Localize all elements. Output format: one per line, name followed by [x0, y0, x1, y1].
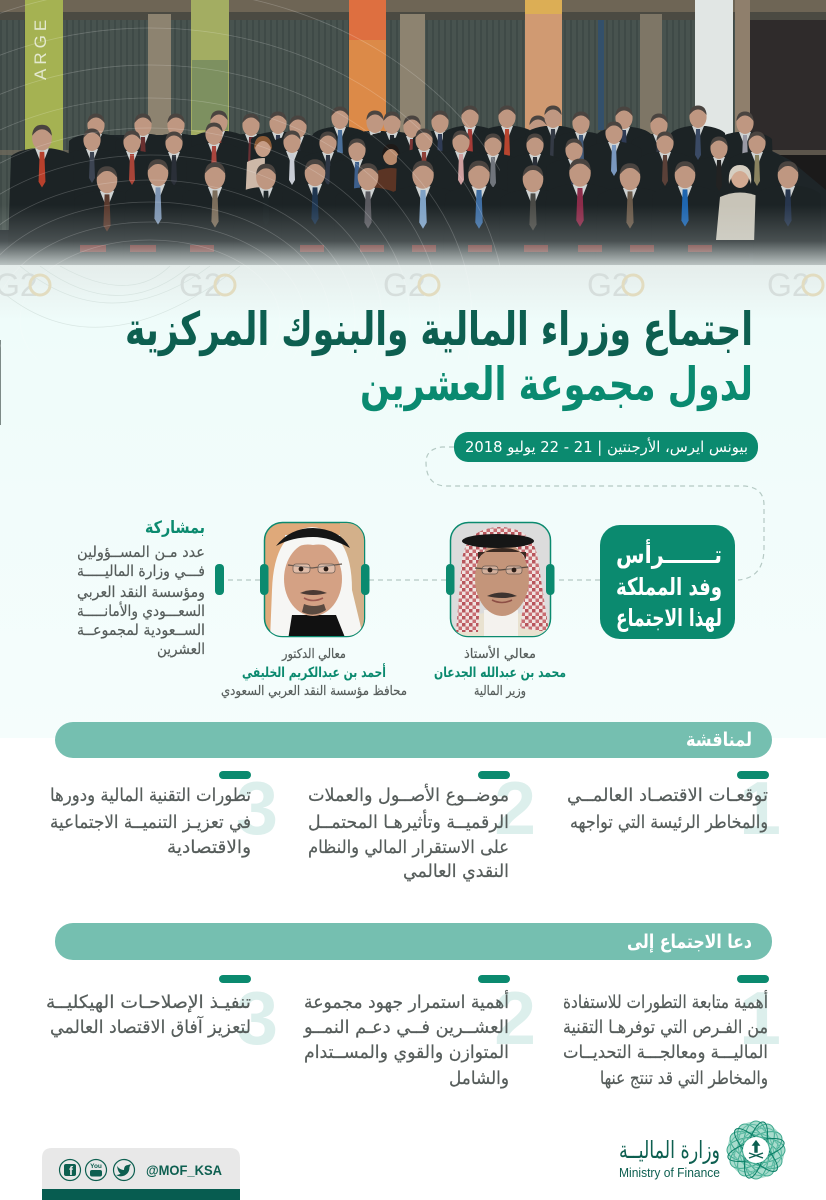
caption: SAMA Governor: محافظ مؤسسة النقد العربي السعودي: [221, 684, 407, 699]
dashed connector: [224, 447, 764, 580]
ministry of finance logo: [619, 1118, 788, 1182]
call 2: G20 efforts: المتوازن والقوي والمســتدام: [304, 1042, 509, 1063]
caption: Minister of Finance: وزير المالية: [474, 684, 526, 699]
date and location pill: بيونس ايرس، الأرجنتين | 21 - 22 يوليو 2018: [465, 437, 748, 456]
call 1: follow developments: 1: [739, 976, 781, 1060]
dark mass of suits: [0, 135, 826, 265]
participation text block: عدد مـن المســؤولين: [77, 543, 205, 561]
item 3: fintech: في تعزيـز التنميــة الاجتماعية: [50, 812, 251, 833]
title: [125, 302, 753, 411]
caption: SAMA Governor: معالي الدكتور: [281, 647, 346, 662]
social handle: @MOF_KSA: [146, 1162, 222, 1178]
item 1: global economy: 1: [739, 766, 781, 850]
item 2: digital assets: الرقميــة وتأثيرهـا المحتمــل: [308, 809, 509, 833]
G20 watermark logos: G2: [179, 267, 222, 303]
contour lines on light band: [0, 266, 240, 327]
social media footer box: [42, 1148, 240, 1200]
G20 watermark logos: G2: [587, 267, 630, 303]
call 2: G20 efforts: 2: [494, 976, 536, 1060]
caption: Minister of Finance: [434, 645, 566, 699]
call 3: structural reforms: لتعزيز آفاق الاقتصاد العالمي: [50, 1015, 251, 1038]
logo rosette: [724, 1118, 788, 1182]
contour line pattern over photo: [0, 0, 500, 348]
call 3: structural reforms: تنفيـذ الإصلاحـات الهيكليــة: [46, 992, 251, 1013]
G20 watermark logos: G2: [383, 267, 426, 303]
participation handle: [215, 564, 224, 595]
call 2: G20 efforts: أهمية استمرار جهود مجموعة: [304, 990, 509, 1013]
section bar: the meeting called for: [55, 923, 772, 960]
call 1: follow developments: [563, 975, 781, 1089]
item 3: fintech: 3: [236, 766, 278, 850]
participation text block: العشرين: [157, 640, 205, 658]
standing delegate on the left: [8, 124, 68, 230]
icon: facebook: [60, 1160, 80, 1180]
icon: twitter: [114, 1160, 134, 1180]
call 1: follow developments: والمخاطر التي قد تنتج عنها: [600, 1068, 768, 1089]
caption: Minister of Finance: معالي الأستاذ: [464, 645, 536, 662]
section bar: to discuss: لمناقشة: [686, 729, 752, 751]
panel: chaired by: تـــــــرأس: [616, 539, 722, 569]
participation text block: السعـــودي والأمانـــــة: [77, 601, 205, 621]
G20 watermark logos: [0, 267, 823, 303]
item 2: digital assets: موضــوع الأصــول والعملات: [308, 784, 509, 806]
call 2: G20 efforts: العشــرين فــي دعـم النمــو: [303, 1017, 509, 1038]
item 1: global economy: توقعـات الاقتصـاد العالمــي: [567, 785, 768, 806]
panel: chaired by: وفد المملكة: [616, 573, 722, 601]
group photo of G20 ministers: [0, 0, 826, 265]
icon: facebook: f: [69, 1164, 74, 1178]
caption: SAMA Governor: [221, 647, 407, 699]
caption: SAMA Governor: أحمد بن عبدالكريم الخليفي: [242, 663, 386, 681]
date and location pill: [454, 432, 758, 462]
section bar: the meeting called for: دعا الاجتماع إلى: [627, 931, 752, 953]
group photo of G20 ministers: ARGE: [31, 16, 50, 80]
call 1: follow developments: الماليـــة ومعالجـــة التحديــات: [563, 1042, 768, 1063]
back row of delegates: [68, 106, 772, 162]
ministry of finance logo: Ministry of Finance: [619, 1166, 720, 1180]
item 2: digital assets: على الاستقرار المالي والنظام: [308, 837, 509, 858]
middle row of delegates: [83, 122, 766, 192]
participation text block: الســعودية لمجموعــة: [77, 621, 205, 639]
participation text block: فـــي وزارة الماليـــــة: [77, 562, 205, 581]
ministry of finance logo: وزارة الماليــة: [619, 1136, 720, 1164]
icon: youtube: [86, 1160, 106, 1180]
section bar: to discuss: [55, 722, 772, 758]
participation text block: [77, 518, 205, 658]
item 3: fintech: تطورات التقنية المالية ودورها: [50, 785, 251, 806]
panel: chaired by: [600, 525, 735, 639]
call 3: structural reforms: 3: [236, 976, 278, 1060]
chairs: [80, 245, 712, 252]
caption: Minister of Finance: محمد بن عبدالله الجدعان: [434, 665, 566, 681]
item 3: fintech: [50, 766, 278, 858]
G20 watermark logos: G2: [767, 267, 810, 303]
front row of seated delegates: [96, 158, 798, 240]
participation text block: ومؤسسة النقد العربي: [77, 583, 205, 602]
participation text block: بمشاركة: [145, 518, 205, 538]
call 3: structural reforms: [46, 975, 278, 1060]
item 1: global economy: والمخاطر الرئيسة التي تواجهه: [570, 812, 768, 833]
portrait: SAMA Governor: [264, 522, 365, 640]
call 2: G20 efforts: والشامل: [449, 1068, 509, 1089]
item 2: digital assets: [308, 766, 536, 882]
item 2: digital assets: 2: [494, 766, 536, 850]
call 1: follow developments: أهمية متابعة التطورات للاستفادة: [563, 990, 768, 1013]
portrait handles: Minister of Finance: [446, 564, 554, 595]
call 2: G20 efforts: [303, 975, 536, 1089]
item 1: global economy: [567, 766, 781, 850]
item 2: digital assets: النقدي العالمي: [403, 861, 509, 882]
icon: youtube: You: [90, 1163, 102, 1170]
call 1: follow developments: من الفـرص التي توفرهـا التقنية: [563, 1017, 768, 1038]
portrait handles: SAMA Governor: [260, 564, 370, 595]
portrait: Minister of Finance: [450, 522, 552, 640]
item 3: fintech: والاقتصادية: [167, 837, 251, 858]
panel: chaired by: لهذا الاجتماع: [616, 604, 722, 632]
